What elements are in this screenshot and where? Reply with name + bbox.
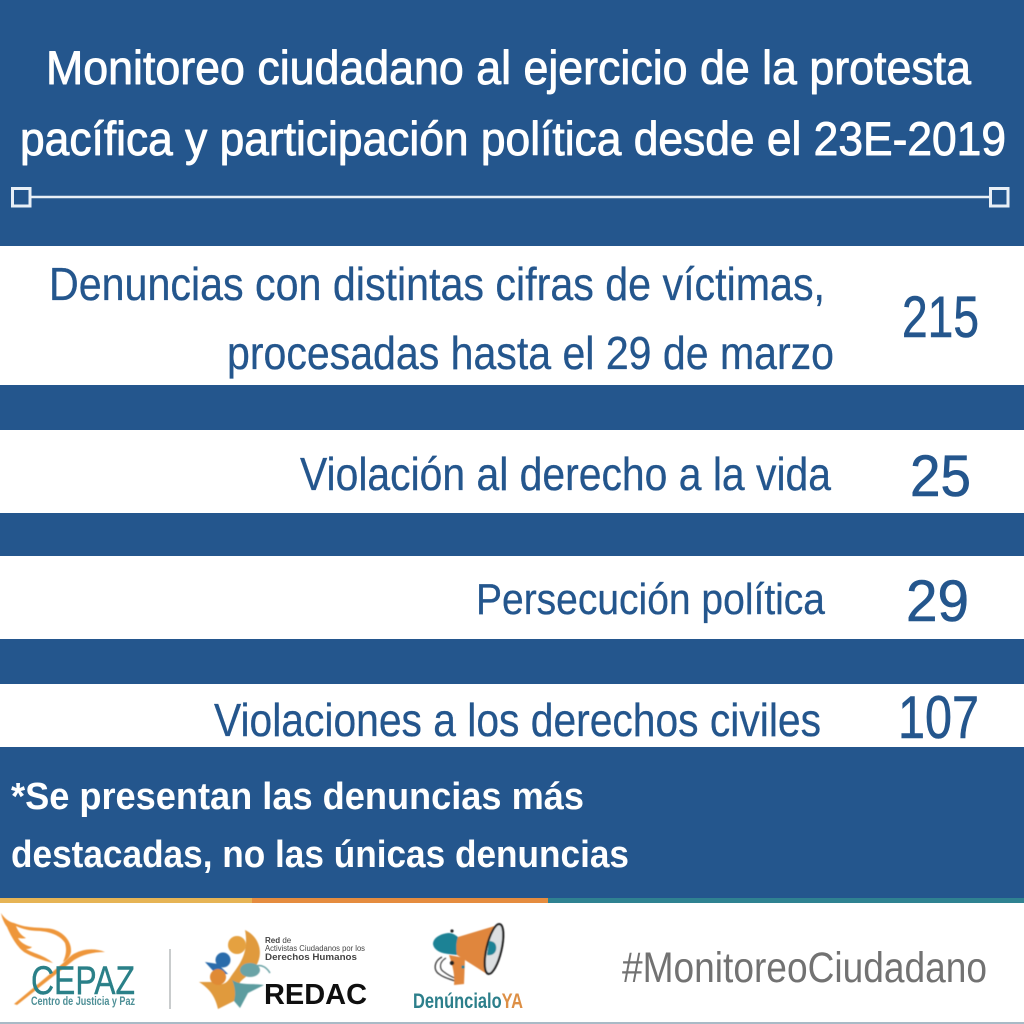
logo: DenúncialoYA <box>413 922 523 1013</box>
title <box>20 41 1006 165</box>
footnote text <box>11 776 629 876</box>
row 3: persecución política: Persecución política <box>476 575 825 624</box>
icon: REDAC figures <box>199 930 270 1009</box>
CEPAZ tagline: Centro de Justicia y Paz <box>31 996 135 1008</box>
DenúncialoYA wordmark: DenúncialoYA <box>413 990 523 1013</box>
band: blue gap 3 <box>0 639 1024 684</box>
logo: REDAC <box>199 930 367 1011</box>
title: Monitoreo ciudadano al ejercicio de la protesta <box>46 41 972 94</box>
icon: megaphone <box>433 922 507 985</box>
tri-colour stripe <box>0 898 1024 903</box>
REDAC small heading: Activistas Ciudadanos por los <box>265 944 365 953</box>
REDAC small heading: Derechos Humanos <box>265 952 357 963</box>
REDAC small heading: Red de <box>265 936 292 945</box>
title divider with end squares <box>12 188 1008 206</box>
row 4: derechos civiles: 107 <box>898 684 979 751</box>
row 1: denuncias procesadas: Denuncias con distintas cifras de víctimas, <box>49 258 825 310</box>
panel: footnote <box>0 747 1024 898</box>
footnote text: *Se presentan las denuncias más <box>11 776 584 818</box>
row 4: derechos civiles <box>214 684 979 751</box>
logo: CEPAZ <box>1 913 135 1008</box>
icon: orange dove <box>1 913 105 1005</box>
bottom rule <box>0 1022 1024 1024</box>
band: blue gap 2 <box>0 513 1024 556</box>
panel: header <box>0 0 1024 246</box>
row 3: persecución política <box>476 569 969 634</box>
row 2: derecho a la vida: Violación al derecho a la vida <box>300 448 831 500</box>
logo separator <box>169 949 171 1009</box>
row 1: denuncias procesadas <box>49 258 979 379</box>
row 1: denuncias procesadas: 215 <box>902 285 979 350</box>
row 1: denuncias procesadas: procesadas hasta el 29 de marzo <box>227 327 834 379</box>
band: blue gap 1 <box>0 385 1024 430</box>
REDAC wordmark: REDAC <box>264 979 367 1011</box>
row 2: derecho a la vida: 25 <box>910 444 971 509</box>
row 3: persecución política: 29 <box>906 569 969 634</box>
row 4: derechos civiles: Violaciones a los derechos civiles <box>214 694 821 746</box>
footnote text: destacadas, no las únicas denuncias <box>11 834 629 876</box>
CEPAZ wordmark: CEPAZ <box>31 959 135 1003</box>
REDAC small heading <box>265 936 365 963</box>
